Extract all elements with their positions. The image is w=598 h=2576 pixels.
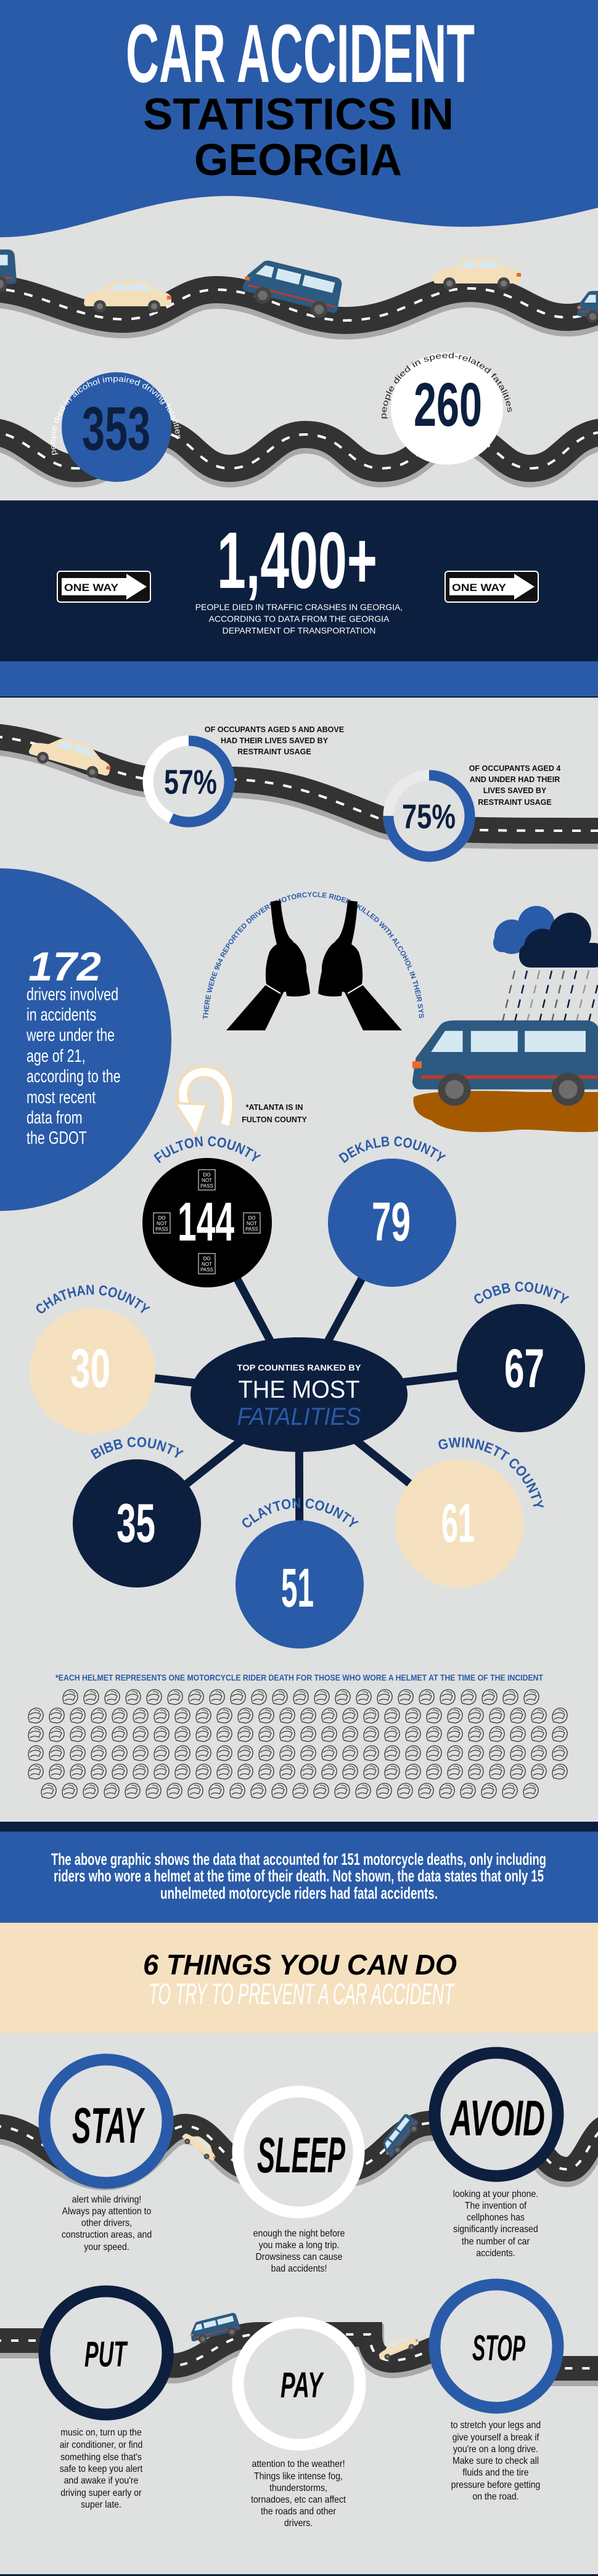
county: Fulton 144: NOT [202,1178,212,1183]
county: DeKalb 79 [328,1136,456,1287]
tip: PUT: super late. [81,2499,121,2510]
text: 57% caption: HAD THEIR LIVES SAVED BY [221,736,329,745]
text: 57% caption [205,725,344,756]
county: Fulton 144: PASS [200,1267,213,1273]
road 4 (tips row 1) [0,2112,598,2176]
stat: 260 speed related: people died in speed-related fatalities [382,353,512,418]
center hub: top counties: THE MOST [238,1376,360,1403]
tip: SLEEP [238,2092,359,2274]
county: Fulton 144: PASS [200,1183,213,1189]
panel: motorcycle note [0,1822,598,1923]
tip: AVOID: The invention of [465,2200,527,2211]
county: Chathan 30: CHATHAN COUNTY [36,1284,150,1313]
county: Chathan 30: 30 [70,1337,110,1399]
donut: 75% [383,770,475,862]
tip: STOP: STOP [472,2328,525,2368]
county: Fulton 144: NOT [202,1262,212,1267]
county: Bibb 35: 35 [117,1492,155,1554]
county: Clayton 51 [236,1498,364,1649]
county: Fulton 144: 144 [178,1191,234,1252]
panel: 1,400+ band: PEOPLE DIED IN TRAFFIC CRASHES IN GEORGIA, [195,602,403,612]
icon: one way sign right: ONE WAY [452,582,507,593]
header background [0,0,598,237]
county: Gwinnett 61: 61 [441,1492,475,1554]
panel: 172 drivers under 21: most recent [27,1088,96,1107]
road 1 with cars [0,250,598,324]
tip: STOP: to stretch your legs and [451,2419,541,2431]
icon: beer bottles toast with curved caption: THERE WERE 964 REPORTED DRIVERS/MOTORCYCLE RIDERS KILLED WITH ALCOHOL IN THEIR SYSTEM [203,892,424,1019]
text: 75% caption [469,764,560,807]
tip: STAY: STAY [72,2098,145,2154]
tip: AVOID: the number of car [462,2236,530,2247]
tip: STAY [44,2060,168,2252]
center hub: top counties: TOP COUNTIES RANKED BY [237,1363,361,1372]
tip: STOP: give yourself a break if [453,2432,539,2443]
stat: 260 speed related: 260 [414,370,482,439]
tip: PAY: attention to the weather! [252,2458,345,2469]
panel: 172 drivers under 21: 172 [28,944,101,989]
tip: STOP: Make sure to check all [453,2455,539,2466]
panel: 172 drivers under 21: age of 21, [27,1046,85,1066]
title [126,8,475,185]
heading: 6 things you can do: 6 THINGS YOU CAN DO [143,1949,457,1981]
county: Gwinnett 61: GWINNETT COUNTY [438,1437,544,1507]
panel: 172 drivers under 21: the GDOT [27,1128,87,1148]
text: 57% caption: RESTRAINT USAGE [237,748,311,756]
county: Fulton 144: DO [158,1215,165,1221]
county: Fulton 144: NOT [157,1221,167,1226]
donut: 75%: 75% [402,797,456,836]
text: Atlanta note [242,1103,308,1124]
tip: SLEEP: you make a long trip. [259,2240,339,2251]
tip: AVOID: significantly increased [453,2223,538,2235]
text: 57% caption: OF OCCUPANTS AGED 5 AND ABOVE [205,725,344,734]
tip: PAY [238,2323,360,2529]
tip: PAY: drivers. [284,2517,313,2529]
center hub: top counties: FATALITIES [237,1403,361,1430]
tip: PAY: thunderstorms, [269,2482,327,2493]
panel: 1,400+ band: DEPARTMENT OF TRANSPORTATION [223,626,375,635]
tip: PUT: air conditioner, or find [60,2439,142,2450]
tip: STOP: on the road. [472,2491,519,2502]
center hub: top counties [190,1337,408,1452]
stat: 260 speed related [382,353,512,465]
text: 75% caption: RESTRAINT USAGE [478,798,552,807]
county: Fulton 144 [142,1136,272,1287]
icon: car in mud puddle [412,1021,598,1132]
panel: 1,400+ band: 1,400+ [217,515,377,605]
tip: STAY: Always pay attention to [62,2206,151,2217]
title: GEORGIA [194,136,402,185]
panel: 172 drivers under 21: drivers involved [27,985,118,1005]
text: 75% caption: LIVES SAVED BY [483,786,547,795]
tip: STAY: alert while driving! [72,2194,141,2205]
tip: SLEEP: bad accidents! [271,2263,327,2274]
tip: STOP: pressure before getting [451,2479,540,2490]
county: Fulton 144: PASS [245,1226,258,1232]
county: Cobb 67 [457,1282,585,1432]
tip: STOP: fluids and the tire [462,2467,529,2478]
text: helmet legend: *EACH HELMET REPRESENTS ONE MOTORCYCLE RIDER DEATH FOR THOSE WHO WORE A HELMET AT THE TIME OF THE INCIDENT [55,1673,543,1682]
tip: STOP: you're on a long drive. [453,2444,538,2455]
tip: SLEEP: SLEEP [257,2127,345,2183]
tip: PUT [44,2291,168,2510]
title: STATISTICS IN [143,90,454,139]
county: Bibb 35: BIBB COUNTY [90,1437,184,1459]
panel: motorcycle note: unhelmeted motorcycle riders had fatal accidents. [160,1884,438,1902]
tip: PAY: tornadoes, etc can affect [251,2494,346,2505]
road 2 [0,431,598,472]
stat: 353 alcohol impaired: 353 [82,394,150,463]
icon: one way sign right [445,571,538,602]
panel: 172 drivers under 21: according to the [27,1067,121,1086]
icon: one way sign left: ONE WAY [64,582,119,593]
text: 75% caption: OF OCCUPANTS AGED 4 [469,764,560,773]
text: 75% caption: AND UNDER HAD THEIR [470,775,560,784]
county: Cobb 67: 67 [504,1337,544,1399]
road 5 (tips row 2) [0,2312,598,2372]
panel: 172 drivers under 21: were under the [26,1025,115,1045]
chart: helmet pictogram (151 helmets) [26,1687,571,1800]
tip: AVOID: looking at your phone. [453,2188,538,2199]
icon: one way sign left [57,571,150,602]
tip: PUT: safe to keep you alert [60,2463,143,2474]
county: Clayton 51: 51 [281,1557,314,1618]
tip: AVOID [435,2053,558,2259]
county: Gwinnett 61 [395,1437,544,1588]
tip: PUT: driving super early or [60,2487,142,2498]
county: Fulton 144: FULTON COUNTY [154,1136,261,1164]
tip: PUT: something else that's [60,2452,142,2463]
panel: 172 drivers under 21: in accidents [27,1005,96,1025]
county: Fulton 144: DO [203,1172,211,1178]
tip: PAY: PAY [281,2365,324,2405]
panel: 1,400+ band: ACCORDING TO DATA FROM THE GEORGIA [209,614,390,624]
county: DeKalb 79: DEKALB COUNTY [338,1136,446,1164]
county: Fulton 144: PASS [155,1226,168,1232]
county: Bibb 35 [73,1437,201,1588]
county: Fulton 144: NOT [247,1221,257,1226]
tip: AVOID: cellphones has [467,2212,525,2223]
county: Clayton 51: CLAYTON COUNTY [242,1498,359,1528]
tip: PUT: PUT [84,2334,128,2374]
chart: connectors [92,1223,521,1584]
county: Cobb 67: COBB COUNTY [474,1282,570,1304]
tip: SLEEP: Drowsiness can cause [256,2251,342,2262]
tip: SLEEP: enough the night before [253,2228,345,2239]
text: Atlanta note: *ATLANTA IS IN [246,1103,303,1112]
county: Fulton 144: DO [248,1215,255,1221]
tip: STAY: construction areas, and [62,2229,152,2240]
tip: PUT: and awake if you're [64,2475,138,2486]
county: DeKalb 79: 79 [372,1191,411,1252]
icon: beer bottles toast with curved caption [203,892,424,1030]
tip: STAY: other drivers, [81,2217,132,2228]
panel: 172 drivers under 21 [0,868,171,1211]
text: Atlanta note: FULTON COUNTY [242,1115,308,1124]
tip: AVOID: accidents. [476,2248,515,2259]
stat: 353 alcohol impaired: people died in alcohol impaired driving fatalities [51,376,181,455]
donut: 57%: 57% [164,762,217,801]
tip: STAY: your speed. [84,2241,129,2252]
tip: PAY: Things like intense fog, [254,2471,343,2482]
tip: STOP [435,2285,558,2502]
arrow: curved pointer to Fulton [175,1072,228,1136]
donut: 57% [143,736,234,827]
panel: 172 drivers under 21: data from [27,1108,83,1128]
county: Chathan 30 [30,1284,155,1434]
tip: PAY: the roads and other [261,2506,336,2517]
county: Fulton 144: DO [203,1256,211,1262]
heading: 6 things you can do [0,1923,598,2033]
tip: PUT: music on, turn up the [60,2427,142,2438]
panel: 1,400+ band [0,500,598,698]
icon: rain cloud [493,906,598,1048]
road 3 with car [0,730,598,834]
